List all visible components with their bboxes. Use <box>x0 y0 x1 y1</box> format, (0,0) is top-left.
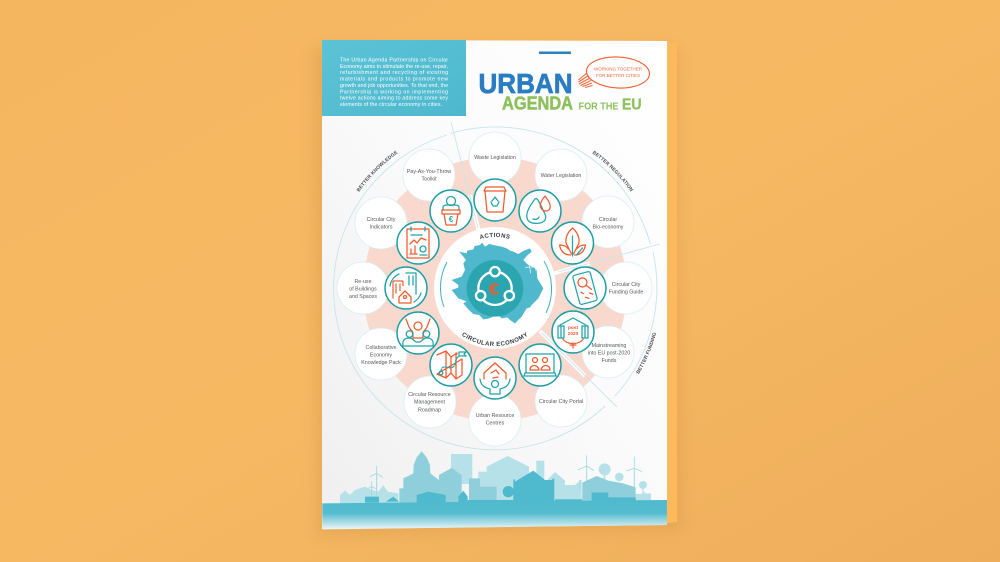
text block: introduction <box>340 58 448 108</box>
euro symbol: € <box>489 279 499 299</box>
skyline <box>322 451 667 529</box>
logo: Urban Agenda for the EU: AGENDA <box>502 92 573 114</box>
logo: Urban Agenda for the EU <box>478 55 650 114</box>
action: Circular Bio-economy: Circular <box>599 217 617 223</box>
text block: introduction: refurbishment and recycling of existing <box>340 70 448 76</box>
centre: circular triad <box>478 272 512 305</box>
action: Circular City Funding Guide <box>600 262 652 314</box>
icon: collaborating people <box>397 312 439 354</box>
logo: Urban Agenda for the EU: URBAN <box>478 68 572 99</box>
text block: introduction: growth and job opportunities. To that end, the <box>340 83 448 89</box>
back orange sheet <box>660 42 677 524</box>
icon: plant leaves <box>552 222 594 264</box>
centre: city silhouette <box>452 243 543 323</box>
action: Collaborative Economy Knowledge Pack: Collaborative <box>366 345 397 351</box>
skyline: ground band <box>322 500 667 529</box>
logo: orange stripes <box>578 73 592 88</box>
heading: actions: ACTIONS <box>480 232 510 240</box>
poster shadow <box>312 48 682 536</box>
action: Circular Resource Management Roadmap: Circular Resource <box>408 392 451 398</box>
action: Pay-As-You-Throw Toolkit: Pay-As-You-Throw <box>407 169 451 175</box>
text block: introduction: twelve actions aiming to address some key <box>340 96 448 102</box>
heading: better regulation: BETTER REGULATION <box>592 150 634 192</box>
action: Urban Resource Centres: Urban Resource <box>476 413 514 419</box>
action: Mainstreaming into EU post-2020 Funds: Mainstreaming <box>592 343 626 349</box>
logo: slogan ellipse <box>586 55 650 90</box>
action labels <box>337 132 652 446</box>
action: Pay-As-You-Throw Toolkit: Toolkit <box>421 176 437 182</box>
dividers <box>451 122 660 407</box>
logo: Urban Agenda for the EU: FOR THE <box>578 100 618 112</box>
heading: circular economy: CIRCULAR ECONOMY <box>462 332 527 346</box>
action: Waste Legislation <box>469 132 521 184</box>
action: Collaborative Economy Knowledge Pack: Economy <box>370 352 392 358</box>
logo: Urban Agenda for the EU: EU <box>622 96 642 114</box>
panel: introduction <box>322 40 466 116</box>
action: Re-use of Buildings and Spaces <box>337 262 389 314</box>
action: Circular City Portal <box>535 375 587 427</box>
post-2020 text: 2020 <box>568 331 579 337</box>
centre: dark disc <box>467 260 523 317</box>
action: Waste Legislation: Waste Legislation <box>474 155 516 161</box>
logo: slogan: FOR BETTER CITIES <box>596 73 640 78</box>
wind turbines <box>525 263 540 273</box>
skyline: back layer <box>340 454 651 503</box>
icon: funding phone <box>564 267 606 309</box>
action: Circular City Indicators <box>355 197 407 249</box>
action: Circular Resource Management Roadmap: Roadmap <box>418 408 441 414</box>
text block: introduction: materials and products to promote new <box>340 77 448 83</box>
action: Circular Bio-economy <box>582 196 634 248</box>
action: Circular City Funding Guide: Circular City <box>612 282 641 288</box>
logo: slogan: WORKING TOGETHER <box>594 66 643 72</box>
text block: introduction: elements of the circular economy in cities. <box>340 102 442 108</box>
heading: better knowledge: BETTER KNOWLEDGE <box>356 150 398 192</box>
skyline: wind turbines <box>368 455 642 500</box>
action: Re-use of Buildings and Spaces: and Spaces <box>349 294 377 300</box>
euro sign: € <box>449 215 454 224</box>
icon: portal laptop <box>519 344 561 386</box>
action: Re-use of Buildings and Spaces: Re-use <box>354 279 372 285</box>
action: Water Legislation: Water Legislation <box>541 173 581 179</box>
action: Circular City Indicators: Indicators <box>370 224 393 230</box>
icon: water drops <box>519 190 561 232</box>
icon: lectern speaker <box>430 190 472 232</box>
action: Circular Resource Management Roadmap <box>404 376 456 428</box>
action: Collaborative Economy Knowledge Pack: Knowledge Pack <box>361 360 401 366</box>
centre: inner circle <box>434 227 556 349</box>
text block: introduction: The Urban Agenda Partnership on Circular <box>340 58 448 64</box>
action: Urban Resource Centres <box>469 394 521 446</box>
action: Urban Resource Centres: Centres <box>486 420 505 426</box>
heading: better funding: BETTER FUNDING <box>636 332 656 374</box>
action: Mainstreaming into EU post-2020 Funds: Funds <box>602 358 617 364</box>
icon: indicators document <box>397 222 439 264</box>
action: Circular City Portal: Circular City Portal <box>539 399 583 405</box>
pink ring <box>363 157 627 421</box>
action: Water Legislation <box>535 149 587 201</box>
icon: urban resource centre <box>474 357 516 399</box>
inner arcs <box>440 261 552 313</box>
action: Circular Resource Management Roadmap: Management <box>414 400 445 406</box>
action: Circular City Indicators: Circular City <box>367 217 396 223</box>
logo: slogan <box>594 66 643 78</box>
icon: waste bin <box>474 179 516 221</box>
action: Circular Bio-economy: Bio-economy <box>593 224 624 230</box>
icon: folded map <box>430 344 472 386</box>
action: Pay-As-You-Throw Toolkit <box>403 149 455 201</box>
post-2020 text <box>568 325 579 337</box>
action: Mainstreaming into EU post-2020 Funds: into EU post-2020 <box>588 350 630 356</box>
skyline: middle layer <box>399 451 636 503</box>
action: Circular City Funding Guide: Funding Guide <box>609 290 643 296</box>
icon: re-used buildings <box>385 267 427 309</box>
icon: post-2020 funds <box>552 311 594 353</box>
text block: introduction: Partnership is working on implementing <box>340 89 448 95</box>
action: Collaborative Economy Knowledge Pack <box>355 328 407 380</box>
action: Mainstreaming into EU post-2020 Funds <box>582 326 634 378</box>
accent bar <box>539 52 571 54</box>
post-2020 text: post <box>568 325 578 331</box>
diagram: circular economy actions <box>333 122 660 450</box>
poster <box>322 40 667 530</box>
action: Re-use of Buildings and Spaces: of Buildings <box>349 286 377 292</box>
outer ring arcs <box>334 118 657 450</box>
text block: introduction: Economy aims to stimulate the re-use, repair, <box>340 64 448 70</box>
skyline: front layer <box>365 471 636 503</box>
